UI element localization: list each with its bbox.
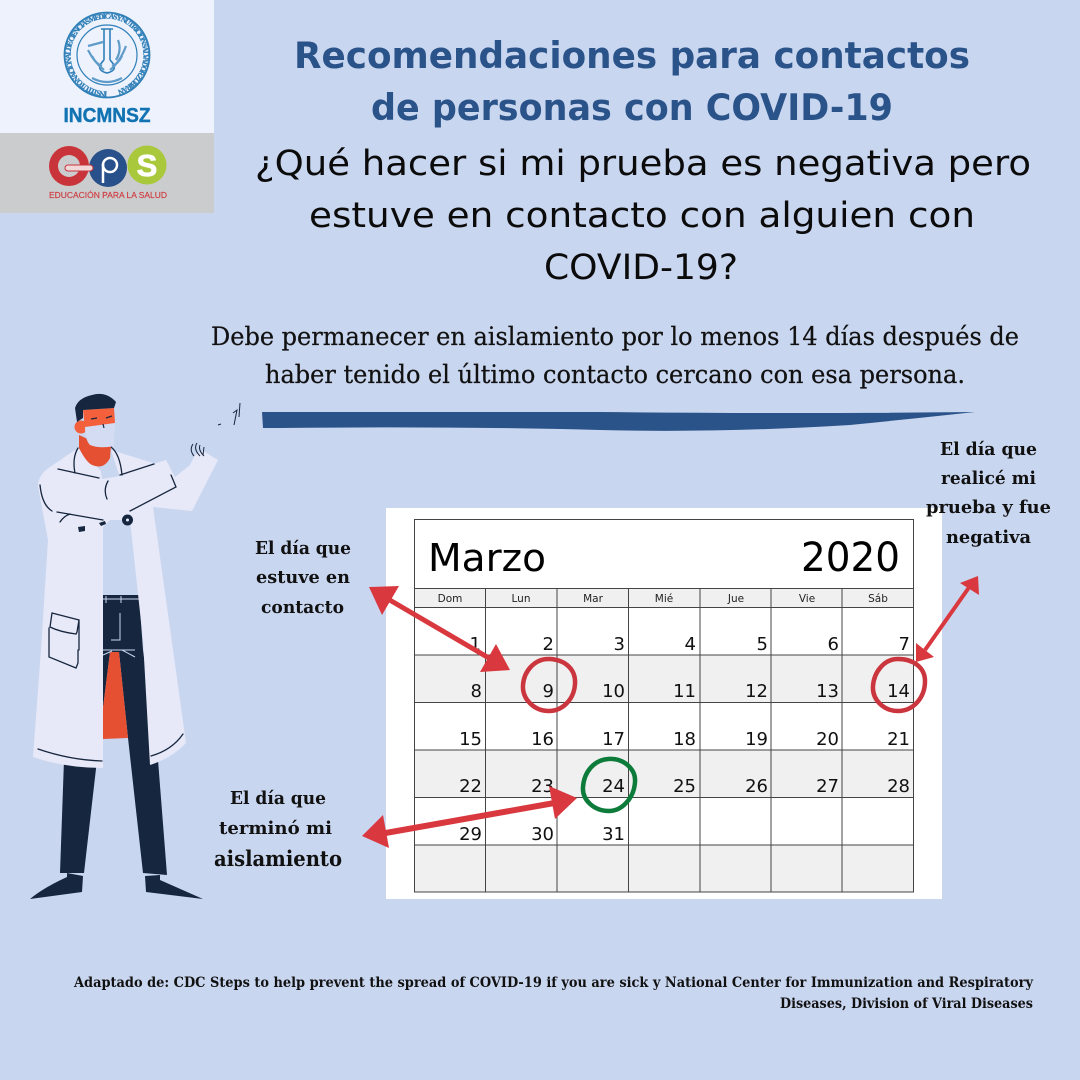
- day numbers: 4: [685, 634, 696, 655]
- title: Recomendaciones para contactos: [294, 34, 970, 77]
- calendar grid: [414, 520, 914, 892]
- label: test day: prueba y fue: [926, 497, 1051, 518]
- logo: EPS circles: [49, 146, 166, 187]
- title: de personas con COVID-19: [371, 86, 893, 129]
- subtitle question: estuve en contacto con alguien con: [309, 196, 975, 236]
- neck: [79, 435, 111, 466]
- eyes: [91, 416, 112, 428]
- source footer: Adaptado de: CDC Steps to help prevent the spread of COVID-19 if you are sick y National Center for Immunization and Respiratory: [73, 975, 1034, 991]
- hand fingers and motion marks: [191, 403, 240, 456]
- calendar: [386, 508, 942, 899]
- day numbers: 20: [816, 729, 839, 750]
- weekday headers: Mar: [583, 593, 604, 605]
- illustration: doctor pointing: [30, 394, 240, 899]
- subtitle question: [255, 144, 1031, 288]
- circle: day 24: [583, 759, 635, 811]
- text block: isolation recommendation: Debe permanecer en aislamiento por lo menos 14 días después de: [211, 322, 1019, 351]
- calendar month: Marzo: [428, 536, 546, 580]
- day numbers: 14: [887, 681, 910, 702]
- day numbers: 12: [745, 681, 768, 702]
- arrow: test day: [916, 576, 979, 662]
- right leg and trousers: [103, 595, 167, 875]
- subtitle question: COVID-19?: [544, 248, 738, 288]
- calendar year: 2020: [801, 535, 900, 581]
- day numbers: 1: [470, 634, 481, 655]
- left leg: [60, 760, 97, 873]
- label: contact day: estuve en: [256, 567, 350, 588]
- label: test day: realicé mi: [941, 468, 1036, 489]
- shirt collar gap: [100, 457, 120, 479]
- weekday headers: Vie: [799, 593, 815, 605]
- day numbers: 26: [745, 776, 768, 797]
- weekday headers: Sáb: [868, 593, 888, 605]
- source footer: Diseases, Division of Viral Diseases: [780, 996, 1033, 1012]
- day numbers: 5: [757, 634, 768, 655]
- source footer: [73, 975, 1034, 1012]
- weekday headers: Jue: [727, 593, 744, 605]
- day numbers: 19: [745, 729, 768, 750]
- day numbers: 13: [816, 681, 839, 702]
- coat outlines: [38, 447, 183, 761]
- day numbers: [459, 634, 910, 845]
- day numbers: 22: [459, 776, 482, 797]
- day numbers: 15: [459, 729, 482, 750]
- label: contact day: [255, 538, 351, 618]
- day numbers: 24: [602, 776, 625, 797]
- day numbers: 11: [673, 681, 696, 702]
- label: contact day: contacto: [261, 597, 344, 618]
- label: end of isolation: terminó mi: [219, 818, 332, 839]
- circle: day 14: [873, 659, 925, 711]
- day numbers: 17: [602, 729, 625, 750]
- logo text: INCMNSZ: INCMNSZ: [64, 105, 150, 127]
- weekday headers: Mié: [655, 593, 673, 605]
- day numbers: 23: [531, 776, 554, 797]
- calendar shaded rows: [414, 588, 914, 892]
- day numbers: 31: [602, 824, 625, 845]
- day numbers: 8: [471, 681, 482, 702]
- label: test day: El día que: [940, 439, 1037, 460]
- weekday headers: [438, 593, 888, 605]
- circle: day 9: [523, 659, 575, 711]
- subtitle question: ¿Qué hacer si mi prueba es negativa pero: [255, 144, 1031, 184]
- day numbers: 7: [899, 634, 910, 655]
- label: end of isolation: [214, 788, 342, 871]
- weekday headers: Dom: [438, 593, 462, 605]
- day numbers: 28: [887, 776, 910, 797]
- day numbers: 10: [602, 681, 625, 702]
- day numbers: 27: [816, 776, 839, 797]
- arrow: end of isolation: [362, 786, 577, 848]
- shoes: [30, 873, 203, 899]
- logo panel: INCMNSZ and EPS: [0, 0, 214, 213]
- hair: [75, 394, 116, 422]
- face mask: [85, 423, 115, 447]
- face: [83, 408, 115, 429]
- day numbers: 2: [543, 634, 554, 655]
- orange inner coat lining: [103, 652, 128, 739]
- day numbers: 21: [887, 729, 910, 750]
- day numbers: 9: [543, 681, 554, 702]
- text block: isolation recommendation: [211, 322, 1019, 389]
- stethoscope: [124, 516, 131, 524]
- day numbers: 29: [459, 824, 482, 845]
- logo text: Educación para la salud: EDUCACIÓN PARA LA SALUD: [49, 190, 167, 200]
- text block: isolation recommendation: haber tenido el último contacto cercano con esa persona.: [265, 360, 965, 389]
- lab coat: [33, 448, 218, 768]
- label: contact day: El día que: [255, 538, 351, 559]
- weekday headers: Lun: [512, 593, 530, 605]
- label: test day: [926, 439, 1051, 548]
- brush divider: [262, 412, 975, 431]
- day numbers: 16: [531, 729, 554, 750]
- label: end of isolation: aislamiento: [214, 846, 342, 871]
- arrow: contact day: [369, 586, 510, 672]
- logo: EPS circles: S: [137, 148, 157, 183]
- title: [294, 34, 970, 129]
- day numbers: 6: [828, 634, 839, 655]
- label: test day: negativa: [946, 527, 1031, 548]
- label: end of isolation: El día que: [230, 788, 326, 809]
- day numbers: 25: [673, 776, 696, 797]
- day numbers: 30: [531, 824, 554, 845]
- day numbers: 18: [673, 729, 696, 750]
- icon: institutional seal: INSTITUTO NACIONAL DE CIENCIAS MEDICAS Y NUTRICION SALVADOR ZUBIRAN: [66, 13, 149, 96]
- day numbers: 3: [614, 634, 625, 655]
- belt lines: [103, 596, 139, 657]
